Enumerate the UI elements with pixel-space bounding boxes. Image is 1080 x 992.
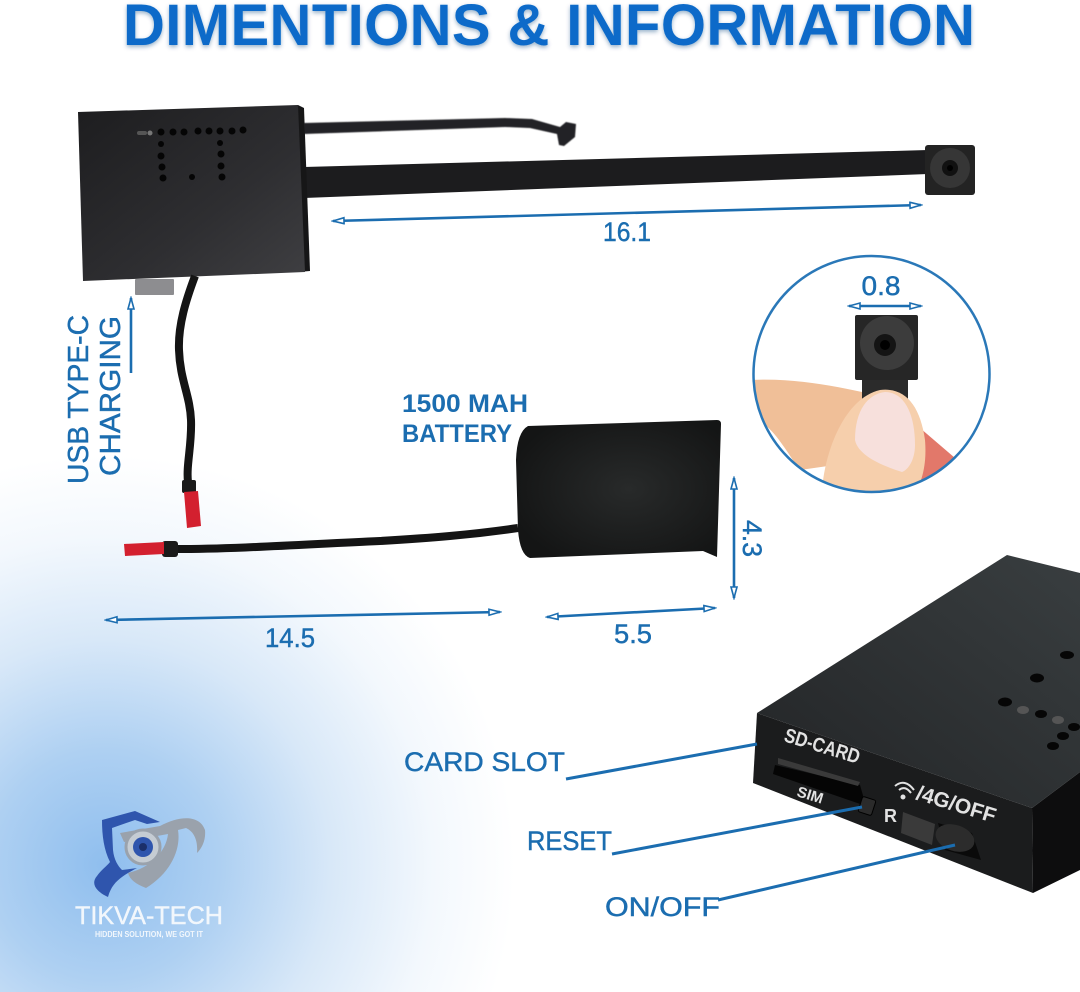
USB-C connector bbox=[135, 279, 174, 295]
top pinholes bbox=[998, 651, 1080, 750]
front face bbox=[753, 713, 1033, 893]
forefinger bbox=[754, 380, 862, 470]
ribbon bbox=[862, 380, 908, 399]
arrow: USB bbox=[130, 298, 132, 373]
device close-up bbox=[753, 555, 1080, 893]
label: reset: RESET bbox=[527, 826, 612, 856]
dimension 16.1: 16.1 bbox=[603, 217, 651, 247]
pointer: on/off bbox=[718, 845, 955, 900]
label: USB type-C charging bbox=[63, 315, 127, 484]
dimension 0.8: 0.8 bbox=[862, 271, 900, 301]
tagline: HIDDEN SOLUTION, WE GOT IT bbox=[95, 930, 203, 939]
control box bbox=[78, 105, 310, 281]
label: card slot: CARD SLOT bbox=[404, 747, 565, 777]
shield, blue half bbox=[94, 811, 160, 897]
printed labels: SD-CARD bbox=[782, 725, 863, 769]
camera module bbox=[925, 145, 975, 195]
main device with ribbons bbox=[78, 105, 975, 295]
label: on/off: ON/OFF bbox=[605, 892, 720, 922]
label: USB type-C charging: CHARGING bbox=[95, 316, 127, 476]
mini camera bbox=[855, 315, 918, 380]
back finger bbox=[921, 430, 954, 480]
arrow: 14.5 bbox=[106, 612, 500, 620]
arrow: 0.8 bbox=[849, 305, 921, 307]
device close-up: /4G/OFF bbox=[914, 782, 999, 828]
switch slot bbox=[901, 812, 935, 845]
box pinholes bbox=[137, 126, 246, 182]
short ribbon cable bbox=[304, 118, 576, 146]
reset button bbox=[858, 796, 876, 816]
device close-up: R bbox=[884, 806, 897, 826]
eye bbox=[126, 830, 160, 864]
label: battery: BATTERY bbox=[402, 420, 512, 448]
top face bbox=[757, 555, 1080, 808]
pointer: reset bbox=[612, 807, 862, 854]
wifi icon bbox=[895, 783, 914, 798]
logo: Tikva-Tech bbox=[75, 811, 223, 939]
side face bbox=[1032, 772, 1080, 893]
wordmark: TIKVA-TECH bbox=[75, 902, 223, 930]
thumb bbox=[822, 390, 925, 495]
dimension 5.5: 5.5 bbox=[614, 619, 652, 649]
power cable with red connector bbox=[179, 276, 201, 528]
dimension 14.5: 14.5 bbox=[265, 623, 315, 653]
on/off switch bbox=[938, 823, 981, 860]
label: battery bbox=[402, 390, 528, 448]
label: USB type-C charging: USB TYPE-C bbox=[63, 315, 95, 484]
circle outline bbox=[754, 256, 990, 492]
dimension 4.3: 4.3 bbox=[737, 520, 767, 557]
arrow: 4.3 bbox=[733, 478, 735, 598]
battery cable bbox=[175, 528, 518, 549]
red connector bbox=[124, 542, 164, 556]
thumbnail bbox=[855, 392, 915, 472]
device close-up: SIM bbox=[795, 784, 825, 808]
battery bbox=[124, 420, 721, 558]
SD card slot bbox=[773, 765, 866, 806]
pointer: card slot bbox=[566, 744, 757, 779]
inset circle: camera in fingers bbox=[752, 256, 990, 500]
arrow: 5.5 bbox=[547, 608, 715, 617]
shield, grey half bbox=[120, 818, 205, 888]
label: battery: 1500 MAH bbox=[402, 390, 528, 418]
long ribbon cable bbox=[304, 150, 928, 198]
arrow: 16.1 bbox=[333, 205, 921, 221]
